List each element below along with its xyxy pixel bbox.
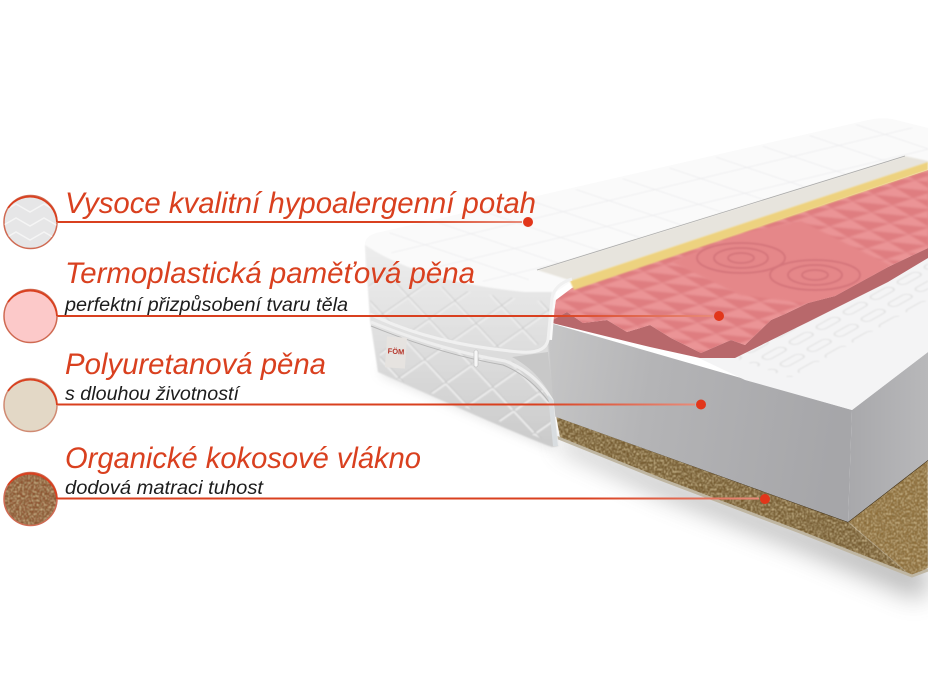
memory foam smooth band xyxy=(672,221,892,306)
callout line: memory foam xyxy=(57,311,724,321)
flap seam xyxy=(370,279,572,352)
fabric label xyxy=(385,336,407,369)
cover side with zipper xyxy=(365,245,572,447)
heading: cover: Vysoce kvalitní hypoalergenní potah xyxy=(65,187,536,220)
layer: memory foam xyxy=(550,170,928,360)
cover opened strip xyxy=(537,156,928,281)
callout line: coconut fibre xyxy=(57,494,770,504)
callout line: polyurethane foam xyxy=(57,400,706,410)
icon: polyurethane foam swatch xyxy=(4,378,57,432)
layer: polyurethane foam xyxy=(505,230,928,522)
heading: coconut fibre: Organické kokosové vlákno xyxy=(65,442,421,475)
heading: memory foam: Termoplastická paměťová pěna xyxy=(65,257,475,290)
latex yellow strip xyxy=(570,162,928,290)
subtext: polyurethane foam: s dlouhou životností xyxy=(65,384,241,405)
lower flap edge showing foam xyxy=(512,352,553,400)
subtext: coconut fibre: dodová matraci tuhost xyxy=(65,478,264,499)
fabric label: FÖM xyxy=(387,346,405,357)
icon: coconut fibre swatch xyxy=(4,472,57,526)
clear cover edge xyxy=(548,395,558,446)
mattress cross-section illustration xyxy=(365,118,928,598)
layer: coconut fibre xyxy=(556,416,928,577)
heading: polyurethane foam: Polyuretanová pěna xyxy=(65,348,326,381)
callout line: cover xyxy=(57,217,533,227)
zipper pull xyxy=(474,350,478,367)
ground shadow xyxy=(380,365,928,598)
icon: cover swatch xyxy=(2,196,58,248)
icon: memory foam swatch xyxy=(4,290,57,342)
memory foam massage rings xyxy=(697,243,860,290)
subtext: memory foam: perfektní přizpůsobení tvaru těla xyxy=(64,295,348,316)
cover top surface xyxy=(365,118,928,340)
